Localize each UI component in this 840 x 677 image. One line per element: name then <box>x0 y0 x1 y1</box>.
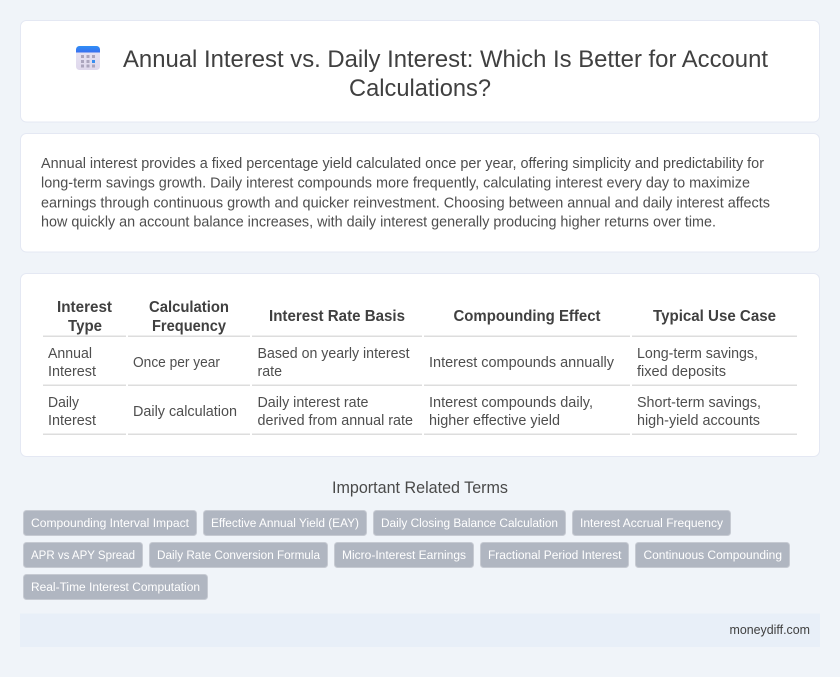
title <box>123 46 768 102</box>
tag: micro-interest earnings: Micro-Interest Earnings <box>342 548 466 562</box>
table row: annual interest: Based on yearly interest <box>258 346 410 362</box>
table header row: Frequency <box>152 318 226 335</box>
table header row: Interest <box>57 299 113 316</box>
table row: daily interest: Daily calculation <box>133 404 237 420</box>
tag: micro-interest earnings <box>334 542 474 568</box>
summary text: earnings through continuous growth and quicker reinvestment. Choosing between annual and daily interest affects <box>41 196 770 212</box>
panel: summary paragraph <box>20 134 820 252</box>
tag: interest accrual frequency: Interest Accrual Frequency <box>580 516 724 530</box>
table header row: Typical Use Case <box>653 308 776 325</box>
title: Calculations? <box>349 75 491 102</box>
table row: daily interest: high-yield accounts <box>637 413 760 429</box>
table row: daily interest: Interest <box>48 413 96 429</box>
tag: daily closing balance calculation <box>374 510 566 536</box>
table row: annual interest: fixed deposits <box>637 364 726 380</box>
table row: annual interest: Interest compounds annually <box>429 355 615 371</box>
heading: important related terms: Important Related Terms <box>332 479 508 497</box>
table row: daily interest: Interest compounds daily, <box>429 395 593 411</box>
table header row: Interest Rate Basis <box>269 308 405 325</box>
tag: effective annual yield: Effective Annual Yield (EAY) <box>211 516 359 530</box>
tag: apr vs apy spread: APR vs APY Spread <box>31 548 135 562</box>
tag: continuous compounding <box>636 542 790 568</box>
table row: daily interest: higher effective yield <box>429 413 560 429</box>
table row: annual interest: Once per year <box>133 355 220 371</box>
tag: daily rate conversion formula: Daily Rate Conversion Formula <box>157 548 320 562</box>
panel: title header <box>20 20 820 122</box>
tag: continuous compounding: Continuous Compounding <box>644 548 782 562</box>
table row: daily interest: Short-term savings, <box>637 395 761 411</box>
table row: annual interest <box>48 346 758 380</box>
summary text: Annual interest provides a fixed percentage yield calculated once per year, offering simplicity and predictability for <box>41 156 764 172</box>
summary text: long-term savings growth. Daily interest compounds more frequently, calculating interest every day to maximize <box>41 176 750 192</box>
tag: effective annual yield <box>204 510 366 536</box>
table row: annual interest: Annual <box>48 346 92 362</box>
tag: daily rate conversion formula <box>150 542 328 568</box>
table row: daily interest <box>48 395 761 429</box>
tag: interest accrual frequency <box>572 510 730 536</box>
tag: fractional period interest: Fractional Period Interest <box>488 548 622 562</box>
table row: daily interest: Daily <box>48 395 80 411</box>
icon: calendar <box>76 46 100 70</box>
table header row: Calculation <box>149 299 229 316</box>
table row: annual interest: rate <box>258 364 282 380</box>
footer bar <box>20 614 820 647</box>
panel: comparison table <box>20 274 820 456</box>
tag: apr vs apy spread <box>24 542 142 568</box>
footer bar: moneydiff.com <box>730 622 810 637</box>
tag: compounding interval impact <box>24 510 196 536</box>
table row: daily interest: derived from annual rate <box>258 413 413 429</box>
tag: real-time interest computation: Real-Time Interest Computation <box>31 580 200 594</box>
summary text <box>41 156 770 230</box>
table header row <box>57 299 776 335</box>
tag: real-time interest computation <box>24 574 208 600</box>
table header row: Type <box>68 318 102 335</box>
summary text: how quickly an account balance increases, with daily interest generally producing higher returns over time. <box>41 214 716 230</box>
table row: annual interest: Interest <box>48 364 96 380</box>
table row: annual interest: Long-term savings, <box>637 346 758 362</box>
tag: daily closing balance calculation: Daily Closing Balance Calculation <box>381 516 558 530</box>
title: Annual Interest vs. Daily Interest: Which Is Better for Account <box>123 46 768 73</box>
table row: daily interest: Daily interest rate <box>258 395 368 411</box>
tag: fractional period interest <box>480 542 628 568</box>
tag: compounding interval impact: Compounding Interval Impact <box>31 516 190 530</box>
table header row: Compounding Effect <box>454 308 601 325</box>
related terms tags <box>24 510 790 600</box>
